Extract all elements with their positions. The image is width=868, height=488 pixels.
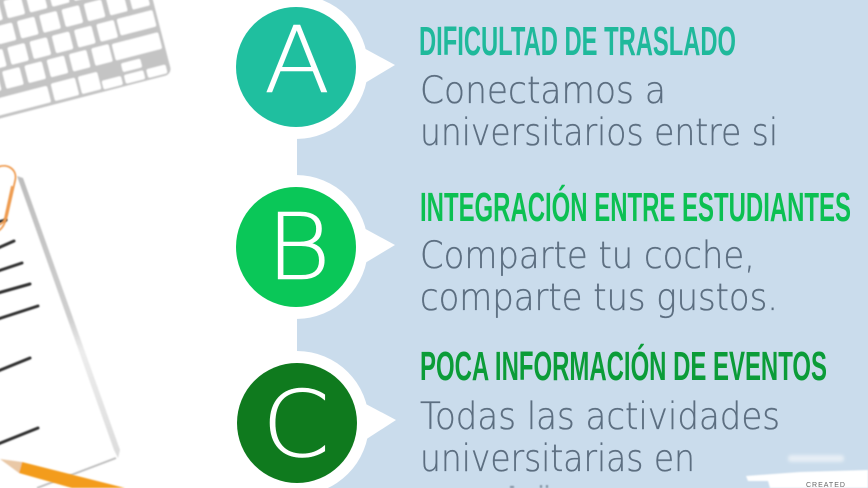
watermark	[746, 455, 868, 488]
panel: blue background	[297, 0, 868, 488]
icon: pencil	[0, 459, 125, 488]
text block C: Todas las actividades	[420, 395, 780, 438]
callout B: circle badge	[224, 175, 395, 319]
text block A: Conectamos a	[420, 69, 666, 112]
callout A: circle badge: A	[264, 7, 330, 114]
text block A: universitarios entre si	[420, 111, 778, 154]
text block C: universitarias en	[420, 437, 695, 480]
callout B: circle badge: B	[266, 194, 331, 301]
text block A	[420, 69, 778, 154]
text block B	[420, 234, 778, 319]
text block B: Comparte tu coche,	[420, 234, 755, 277]
cut-off line fragments at bottom edge	[510, 485, 548, 488]
callout C: circle badge: C	[262, 371, 330, 478]
icon: paper with notes	[0, 176, 120, 488]
callout C: circle badge	[225, 351, 396, 488]
text block C	[420, 395, 780, 480]
callout A: circle badge	[224, 0, 395, 139]
text block B: comparte tus gustos.	[420, 276, 778, 319]
icon: paperclip	[0, 166, 16, 231]
icon: keyboard	[0, 0, 172, 157]
